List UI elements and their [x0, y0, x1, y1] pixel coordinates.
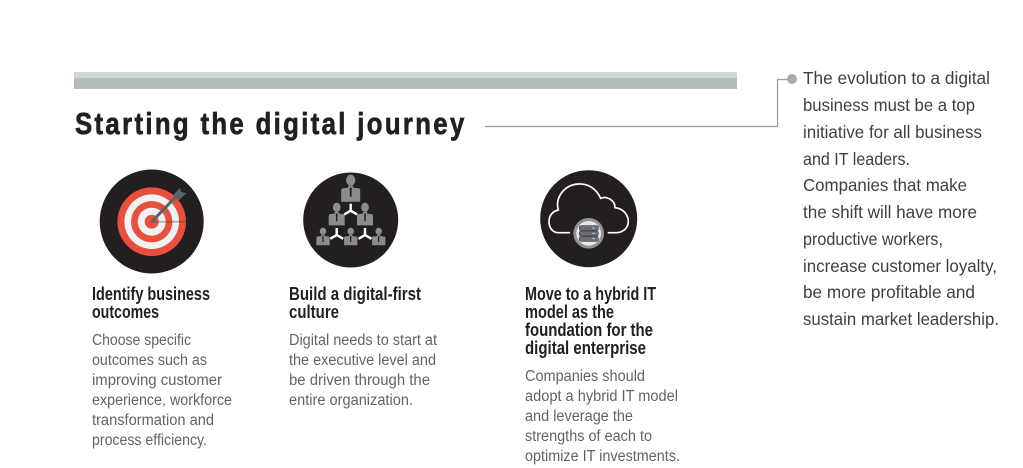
text: identify business outcomes: Choose specific	[92, 332, 191, 349]
heading: move to a hybrid IT model: model as the	[525, 302, 614, 322]
callout text	[803, 68, 999, 329]
callout text: productive workers,	[803, 229, 943, 249]
heading: build a digital-first culture	[289, 284, 421, 322]
heading: move to a hybrid IT model	[525, 284, 656, 358]
text: identify business outcomes: process efficiency.	[92, 432, 207, 449]
text: move to a hybrid IT model	[525, 368, 680, 465]
heading: move to a hybrid IT model: Move to a hybrid IT	[525, 284, 656, 304]
text: build a digital-first culture: be driven through the	[289, 372, 430, 389]
callout text: The evolution to a digital	[803, 68, 990, 88]
callout text: Companies that make	[803, 175, 967, 195]
text: identify business outcomes	[92, 332, 232, 449]
text: move to a hybrid IT model: optimize IT investments.	[525, 448, 680, 465]
heading: identify business outcomes	[92, 284, 210, 322]
text: move to a hybrid IT model: and leverage the	[525, 408, 633, 425]
text: move to a hybrid IT model: adopt a hybrid IT model	[525, 388, 678, 405]
text: identify business outcomes: outcomes such as	[92, 352, 207, 369]
callout text: and IT leaders.	[803, 149, 910, 169]
callout text: sustain market leadership.	[803, 309, 999, 329]
heading: identify business outcomes: Identify business	[92, 284, 210, 304]
icon: cloud with server	[540, 170, 637, 267]
text: identify business outcomes: improving customer	[92, 372, 222, 389]
text: move to a hybrid IT model: Companies should	[525, 368, 645, 385]
text: build a digital-first culture: the executive level and	[289, 352, 436, 369]
text: move to a hybrid IT model: strengths of each to	[525, 428, 652, 445]
title: Starting the digital journey	[75, 107, 464, 142]
callout text: initiative for all business	[803, 122, 982, 142]
icon: target with arrow	[100, 170, 204, 274]
heading: move to a hybrid IT model: foundation for the	[525, 320, 653, 340]
callout text: the shift will have more	[803, 202, 977, 222]
heading: build a digital-first culture: culture	[289, 302, 339, 322]
heading: identify business outcomes: outcomes	[92, 302, 159, 322]
header bar	[74, 72, 737, 89]
text: build a digital-first culture	[289, 332, 438, 409]
heading: build a digital-first culture: Build a digital-first	[289, 284, 421, 304]
text: identify business outcomes: experience, workforce	[92, 392, 232, 409]
connector arrow to callout	[485, 74, 797, 126]
callout text: be more profitable and	[803, 282, 975, 302]
heading: move to a hybrid IT model: digital enterprise	[525, 338, 646, 358]
icon: people hierarchy	[303, 172, 398, 268]
text: build a digital-first culture: Digital needs to start at	[289, 332, 438, 349]
callout text: business must be a top	[803, 95, 975, 115]
text: identify business outcomes: transformation and	[92, 412, 214, 429]
text: build a digital-first culture: entire organization.	[289, 392, 413, 409]
callout text: increase customer loyalty,	[803, 256, 997, 276]
